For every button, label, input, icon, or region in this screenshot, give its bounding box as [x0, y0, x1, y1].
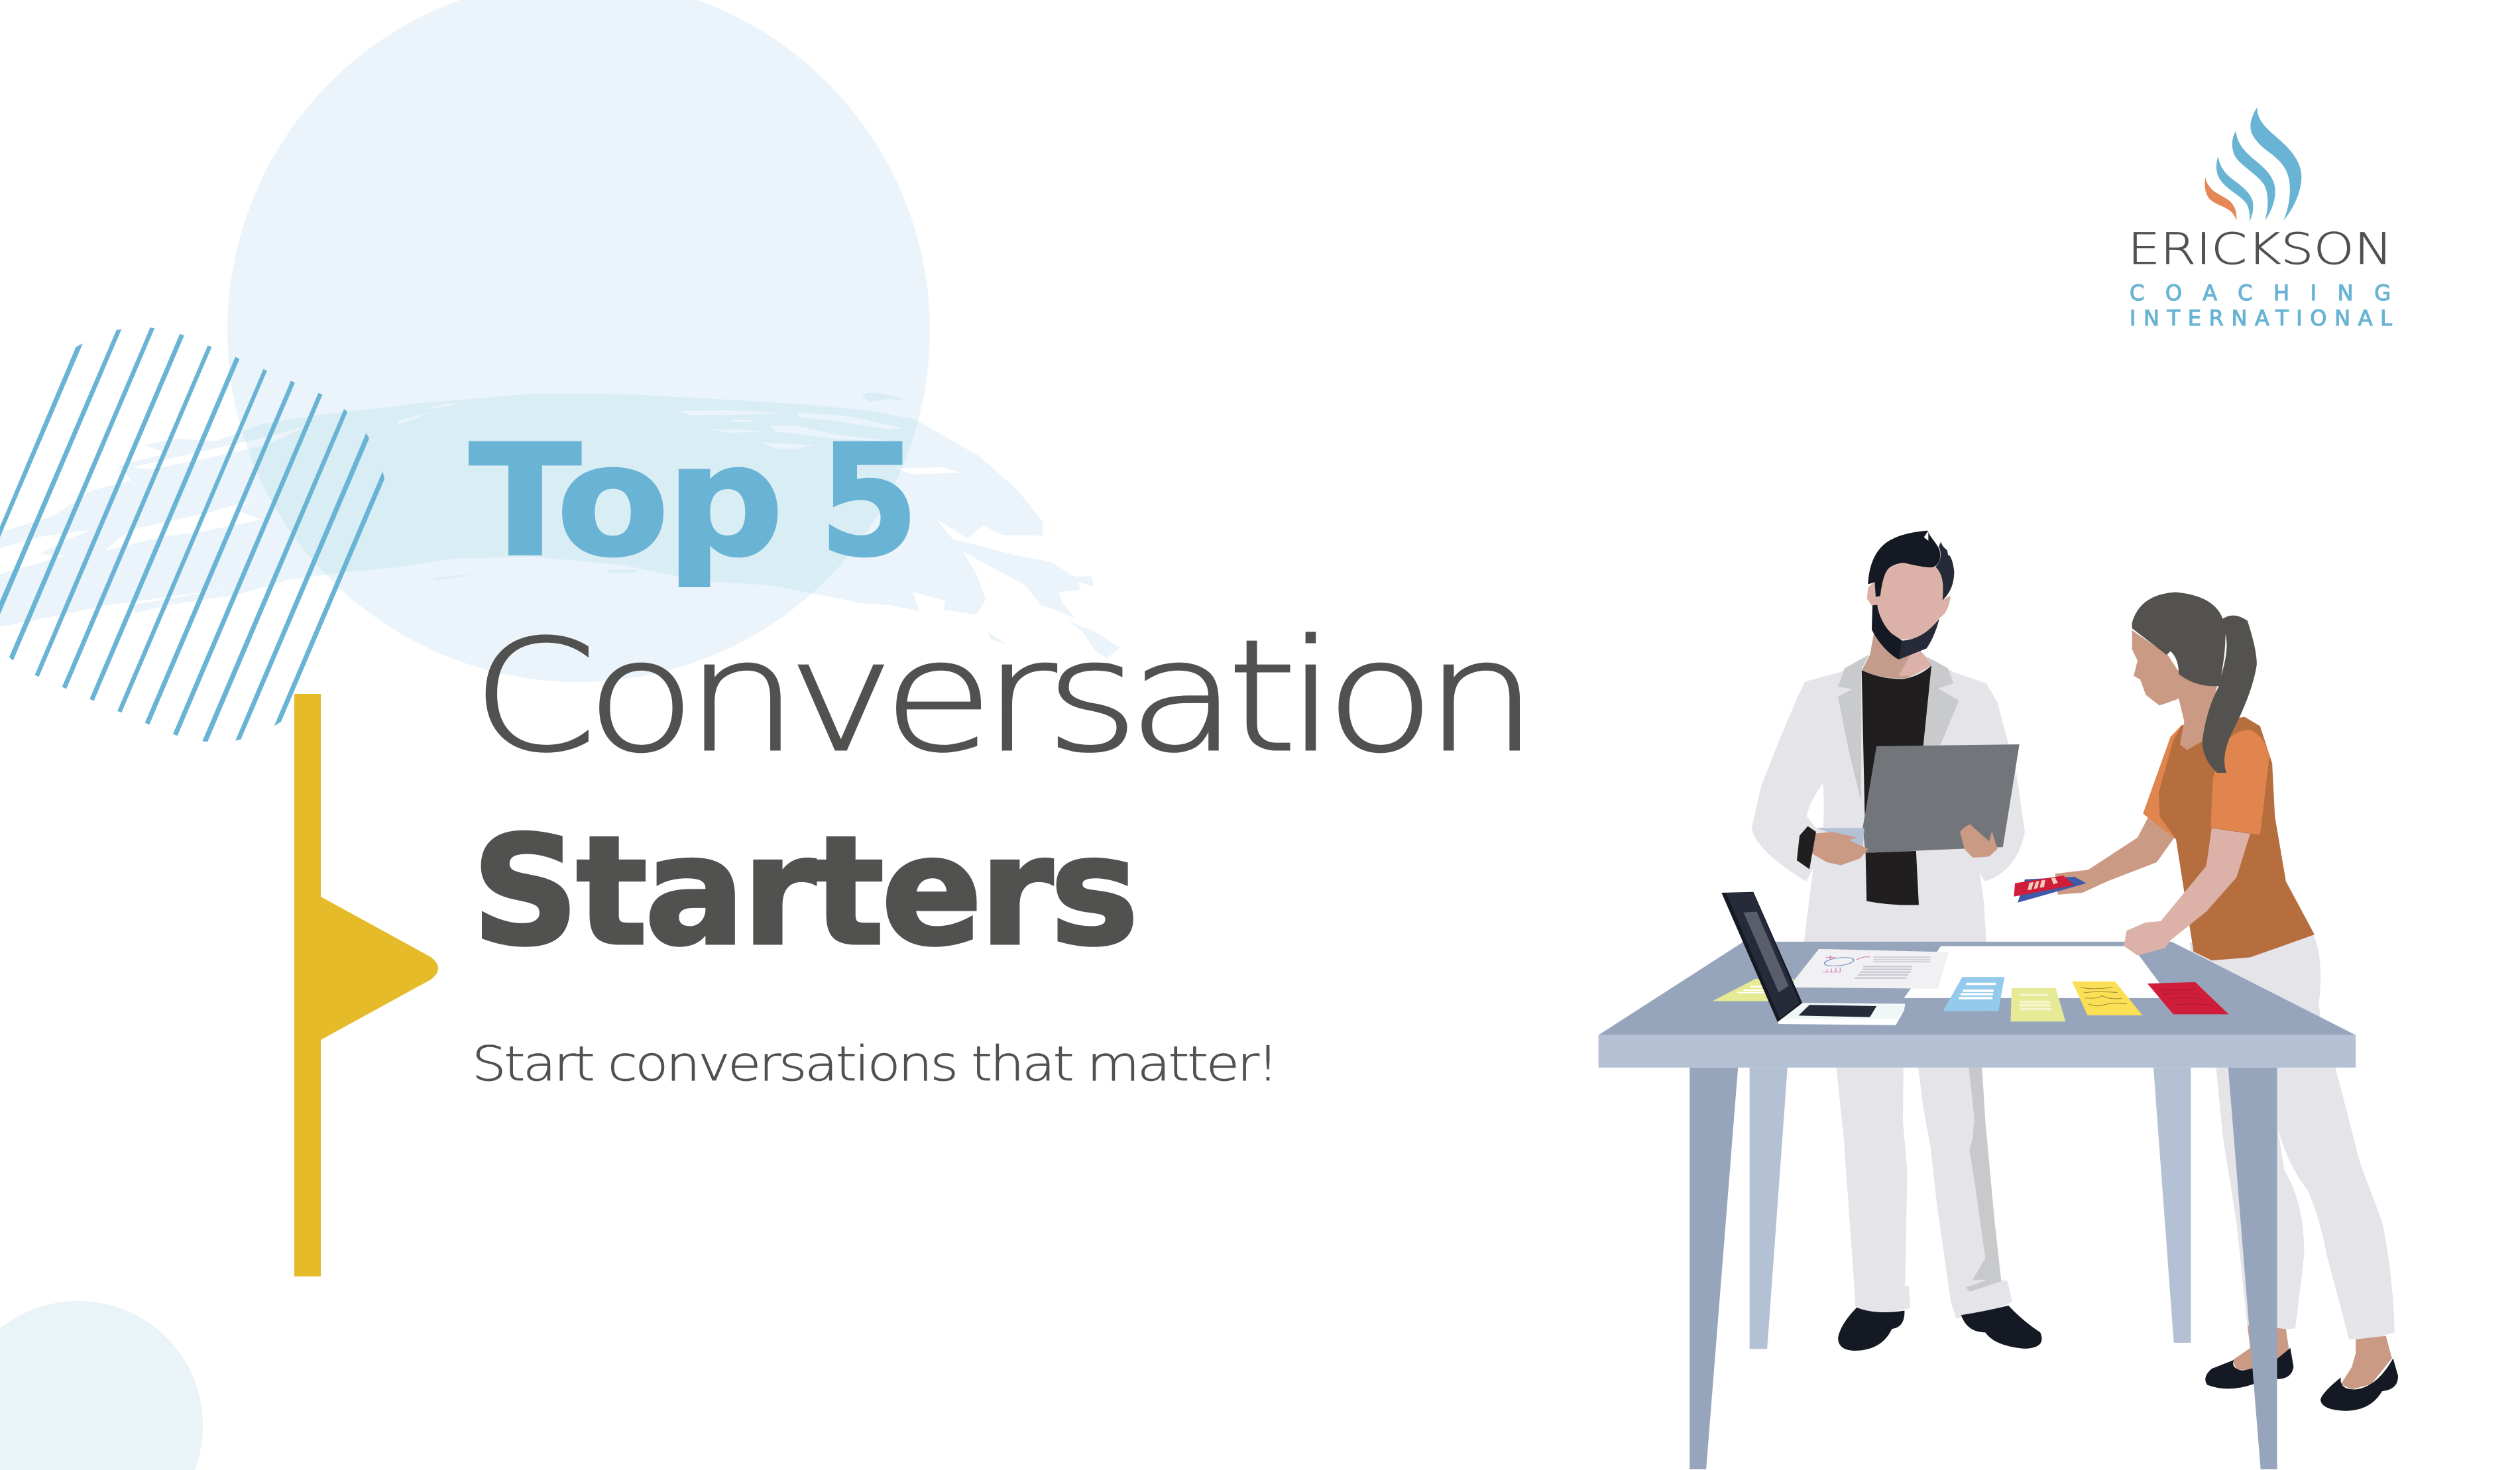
- woman back leg: [2216, 1068, 2304, 1331]
- woman near sleeve: [2210, 730, 2269, 835]
- man hair tuft: [1924, 531, 1928, 541]
- gap between arm and coat: [1807, 782, 1824, 828]
- man ear and face: [1867, 563, 1951, 640]
- woman shirt: [2158, 717, 2315, 960]
- title: Top 5: 5: [819, 413, 919, 591]
- woman far sleeve: [2143, 725, 2181, 840]
- man cuff: [1797, 826, 1816, 869]
- woman front shoe: [2320, 1359, 2398, 1411]
- woman face: [2132, 630, 2217, 706]
- brush stroke: [0, 392, 1120, 658]
- woman near arm: [2124, 828, 2250, 956]
- paper with sketches: [1788, 949, 1949, 989]
- woman far arm: [2055, 817, 2175, 895]
- man head: [1867, 531, 1954, 659]
- flag marker: [294, 694, 438, 1276]
- background circle bottom left: [0, 1301, 203, 1470]
- table back legs: [1750, 1068, 1788, 1349]
- tablet edge: [1816, 828, 1864, 848]
- woman ankles: [2232, 1326, 2290, 1370]
- held laptop: [1862, 744, 2020, 853]
- man beard shade: [1899, 618, 1939, 659]
- logo international: INTERNATIONAL: [2130, 306, 2392, 331]
- woman neck: [2177, 670, 2217, 750]
- title: Top 5: [469, 413, 919, 591]
- sticky note blue: [1943, 977, 2004, 1011]
- man neck: [1862, 634, 1931, 679]
- woman front ankle: [2341, 1336, 2392, 1389]
- man hair: [1868, 531, 1940, 597]
- title: Conversation: Conversation: [472, 607, 1527, 786]
- logo: [2128, 107, 2393, 331]
- man hand right: [1960, 824, 1998, 858]
- man right shoe: [1961, 1306, 2041, 1349]
- background circle large: [227, 0, 930, 682]
- title: Top 5: Top: [469, 413, 781, 591]
- laptop base: [1778, 1003, 1905, 1025]
- woman hair: [2132, 593, 2257, 773]
- table: [1599, 942, 2356, 1469]
- people upper bodies: [1752, 593, 2322, 1030]
- man hair side: [1935, 541, 1954, 600]
- logo flames: [2205, 107, 2301, 222]
- man coat: [1752, 655, 2025, 942]
- man hand left: [1811, 832, 1868, 866]
- logo wordmark: ERICKSON: [2128, 225, 2393, 274]
- sticky note pale left: [1712, 979, 1794, 1001]
- sticky note yellow: [2072, 982, 2142, 1015]
- laptop display: [1743, 912, 1788, 992]
- woman front leg: [2277, 1068, 2395, 1339]
- woman back shoe: [2205, 1348, 2293, 1388]
- legs and shoes of both people: [1837, 1068, 2398, 1411]
- title: Starters: Starters: [472, 805, 1136, 979]
- laptop screen: [1721, 892, 1802, 1022]
- open laptop and woman's near arm: [1721, 828, 2250, 1025]
- logo coaching: COACHING: [2130, 280, 2391, 306]
- man lapel right: [1923, 657, 1959, 746]
- table front legs: [1690, 1068, 1738, 1469]
- laptop keyboard deck: [1783, 1004, 1905, 1019]
- sticky note pale yellow: [2010, 988, 2065, 1021]
- man left shoe: [1838, 1308, 1904, 1351]
- man shirt: [1862, 665, 1931, 905]
- subtitle: Start conversations that matter!: [472, 1036, 1277, 1092]
- man neck light side: [1898, 648, 1931, 676]
- diagonal hatch lines: [0, 327, 384, 742]
- man beard: [1872, 605, 1902, 659]
- sticky note red: [2148, 982, 2229, 1014]
- man right leg: [1918, 1068, 2012, 1319]
- man leg shadow: [1966, 1068, 2001, 1292]
- man lapel left: [1838, 655, 1868, 801]
- woman hips: [2190, 934, 2322, 1030]
- table front edge: [1599, 1035, 2356, 1068]
- man left leg: [1837, 1068, 1910, 1314]
- laptop trackpad: [1798, 1005, 1876, 1017]
- woman ponytail gap: [2221, 634, 2226, 676]
- white sheet: [1904, 946, 2168, 998]
- table top: [1599, 942, 2356, 1035]
- woman cards: [2014, 876, 2087, 903]
